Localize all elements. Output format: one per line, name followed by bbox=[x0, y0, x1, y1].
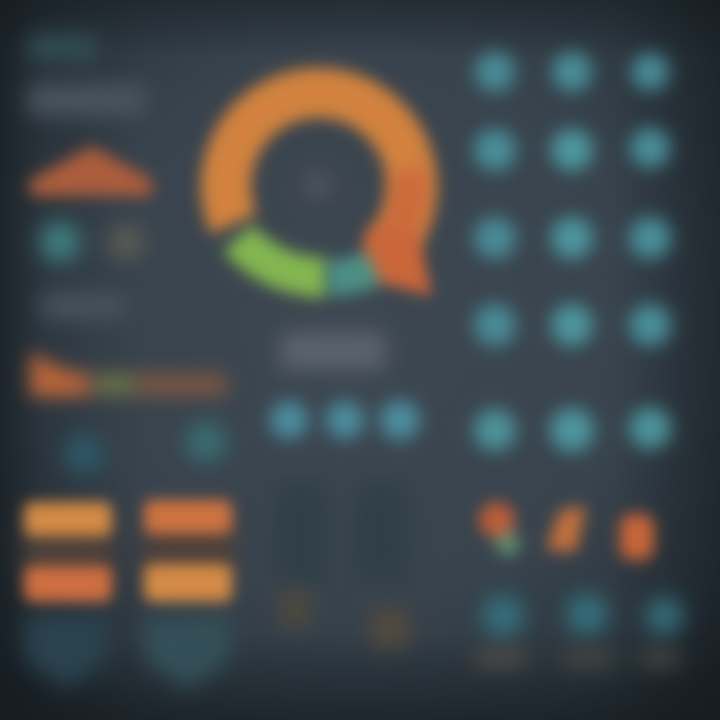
ring: centre highlight bbox=[272, 139, 364, 231]
chart: donut ring bbox=[226, 93, 432, 296]
ring: tail pointer bbox=[352, 228, 432, 296]
icons: orange small charts bbox=[479, 502, 654, 560]
icon: orange bar bbox=[620, 514, 654, 560]
chart: faint centre columns bbox=[276, 484, 408, 646]
icon: orange roof shape bbox=[30, 146, 152, 196]
panel: shields under buttons bbox=[26, 616, 230, 690]
ring: teal segment bbox=[328, 268, 374, 278]
icon: orange diagonal bbox=[546, 506, 586, 552]
button: bottom right bbox=[144, 564, 232, 602]
text block: bottom right faint labels bbox=[476, 650, 680, 666]
ring: orange arc bbox=[226, 93, 412, 256]
ring: right darker arc bbox=[384, 170, 410, 250]
panel: orange buttons bbox=[24, 500, 234, 602]
button: bottom left bbox=[24, 566, 112, 602]
glow between buttons bbox=[24, 525, 234, 575]
text block: below donut bbox=[280, 332, 386, 370]
icons: three centre teal dots bbox=[270, 400, 420, 440]
button: top left bbox=[24, 502, 112, 536]
icons: bottom teal row bbox=[482, 593, 683, 637]
panel: left column header text bbox=[28, 36, 146, 116]
icon grid: teal dots bbox=[474, 52, 671, 452]
button: top right bbox=[144, 500, 232, 534]
ring: green segment bbox=[238, 238, 326, 278]
panel: small icons under roof bbox=[40, 222, 144, 318]
chart: orange and green horizontal strip bbox=[30, 352, 228, 398]
icons: two teal circles left column bbox=[64, 422, 226, 474]
icon: multicolour pie bbox=[479, 502, 520, 556]
